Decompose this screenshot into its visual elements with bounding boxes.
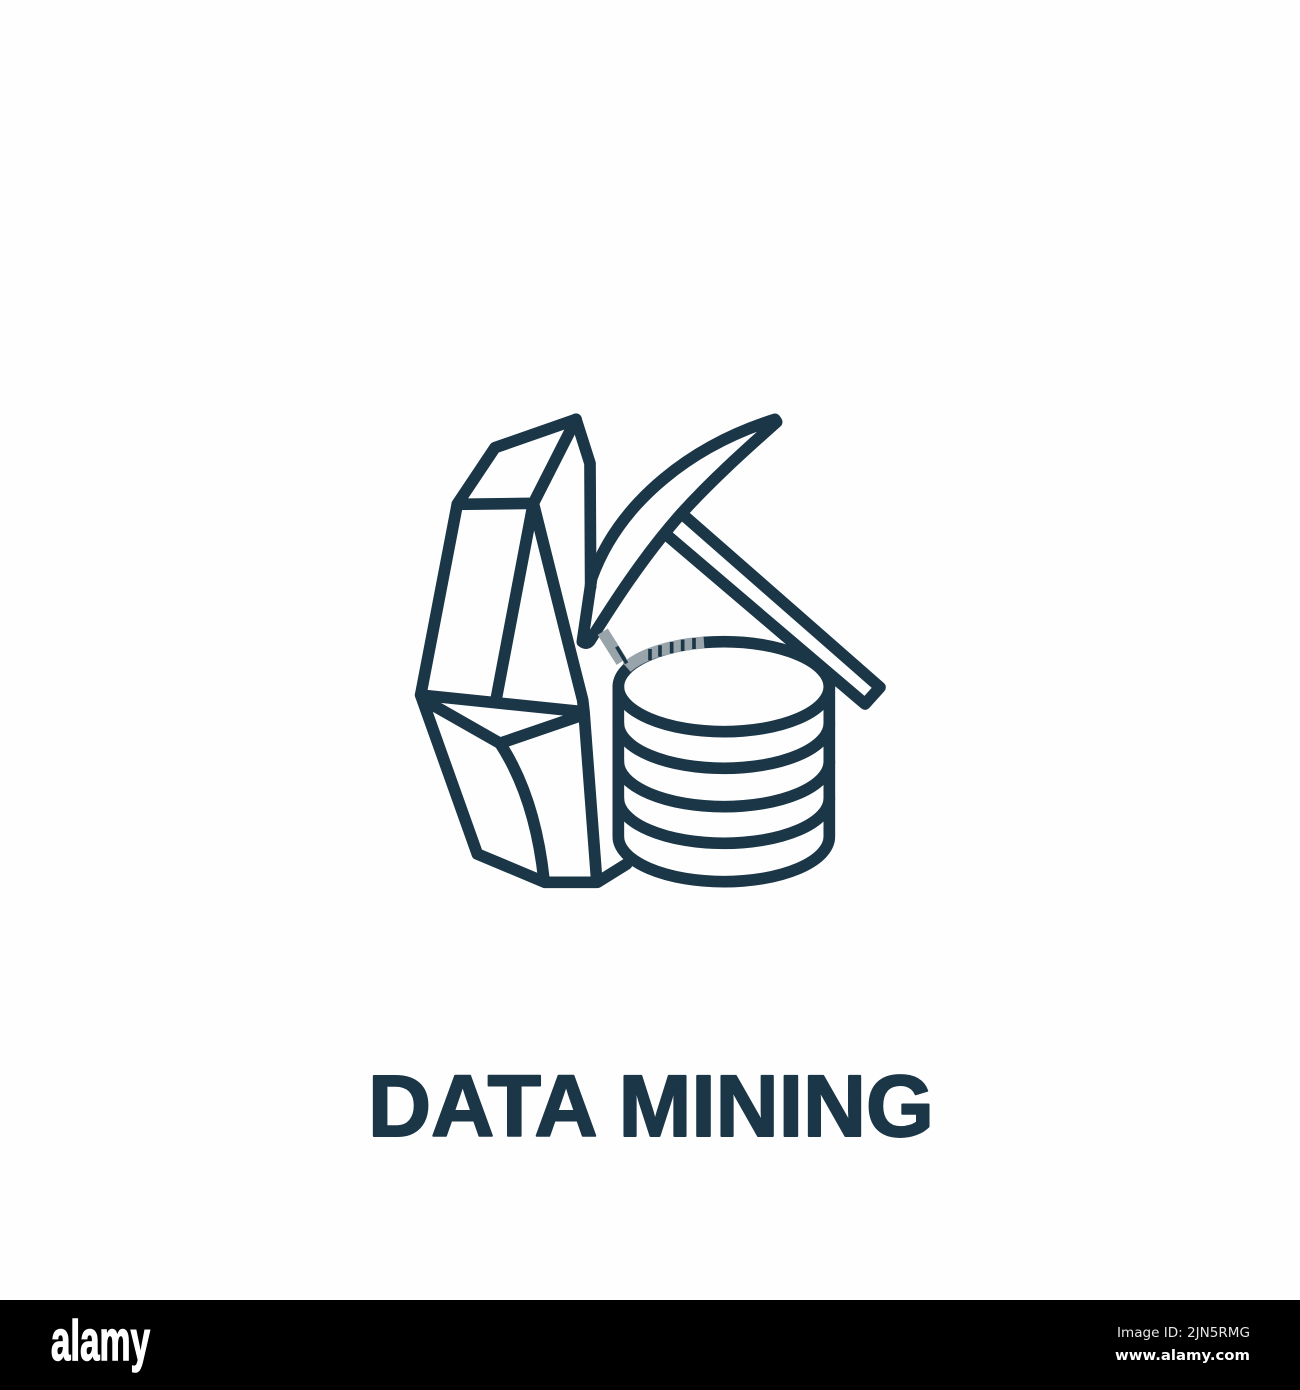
- footer logo: alamy: [51, 1309, 150, 1373]
- icon: data mining: [421, 419, 880, 882]
- watermark overlay on icon: [603, 632, 704, 667]
- icon: data coin stack: [618, 642, 829, 882]
- image id: Image ID: 2JN5RMG: [1117, 1325, 1250, 1341]
- title: DATA MINING: [368, 1058, 934, 1155]
- footer bar: [0, 1300, 1300, 1390]
- icon: pickaxe: [582, 419, 880, 704]
- website: www.alamy.com: [1115, 1348, 1250, 1364]
- icon: crystal rock: [421, 419, 627, 882]
